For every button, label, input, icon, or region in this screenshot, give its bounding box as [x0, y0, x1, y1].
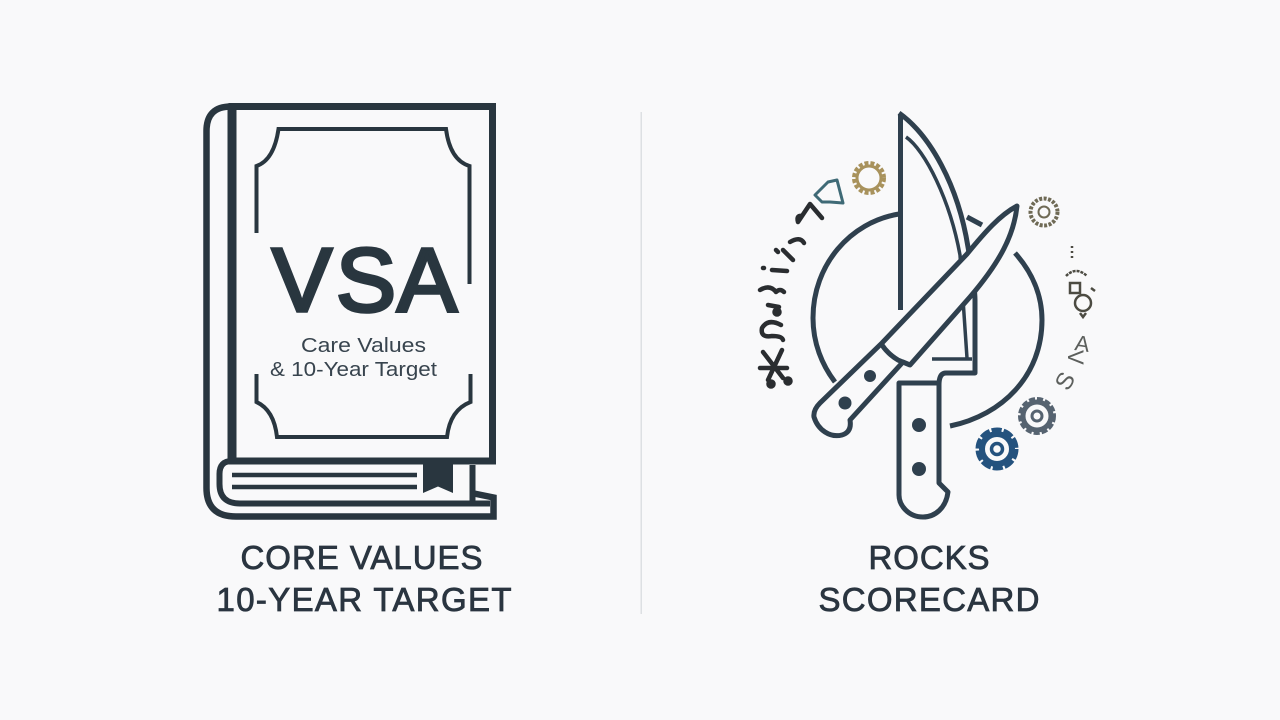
right caption: SCORECARD	[818, 581, 1040, 618]
gear: teal outline	[815, 180, 843, 203]
ornamental letters on the right arc	[1050, 330, 1092, 395]
book subtitle: & 10-Year Target	[270, 359, 437, 381]
book pages	[220, 461, 490, 504]
gear: blue	[978, 430, 1016, 468]
book cover outline	[206, 106, 494, 516]
panel: knives icon	[813, 113, 1042, 517]
book subtitle: Care Values	[301, 335, 426, 357]
gear: lower grey	[1020, 399, 1054, 433]
page lines	[232, 475, 417, 487]
left caption: 10-YEAR TARGET	[216, 581, 512, 618]
diagonal knife	[814, 206, 1017, 436]
left caption	[216, 539, 512, 618]
decorative gears	[815, 163, 1095, 468]
book subtitle	[270, 335, 437, 381]
ornamental letters on the right arc: A	[1073, 330, 1092, 357]
right caption	[818, 539, 1040, 618]
left caption: CORE VALUES	[240, 539, 482, 576]
ornamental marks: left arc	[760, 204, 822, 386]
right caption: ROCKS	[868, 539, 990, 576]
ornamental letters on the right arc: S	[1050, 368, 1081, 395]
cover frame	[256, 129, 470, 437]
gear: upper right	[1030, 198, 1058, 226]
gear: gold ring	[854, 163, 884, 193]
circle arcs	[813, 214, 1042, 426]
bookmark	[423, 464, 453, 493]
ornamental letters on the right arc: V	[1063, 350, 1088, 365]
divider	[640, 112, 642, 614]
book cover front	[232, 106, 492, 461]
panel: book icon	[206, 106, 494, 516]
upright knife	[899, 113, 975, 517]
book spine	[228, 106, 236, 461]
book title: VSA: VSA	[272, 231, 457, 331]
gear: right small cluster	[1066, 246, 1095, 317]
